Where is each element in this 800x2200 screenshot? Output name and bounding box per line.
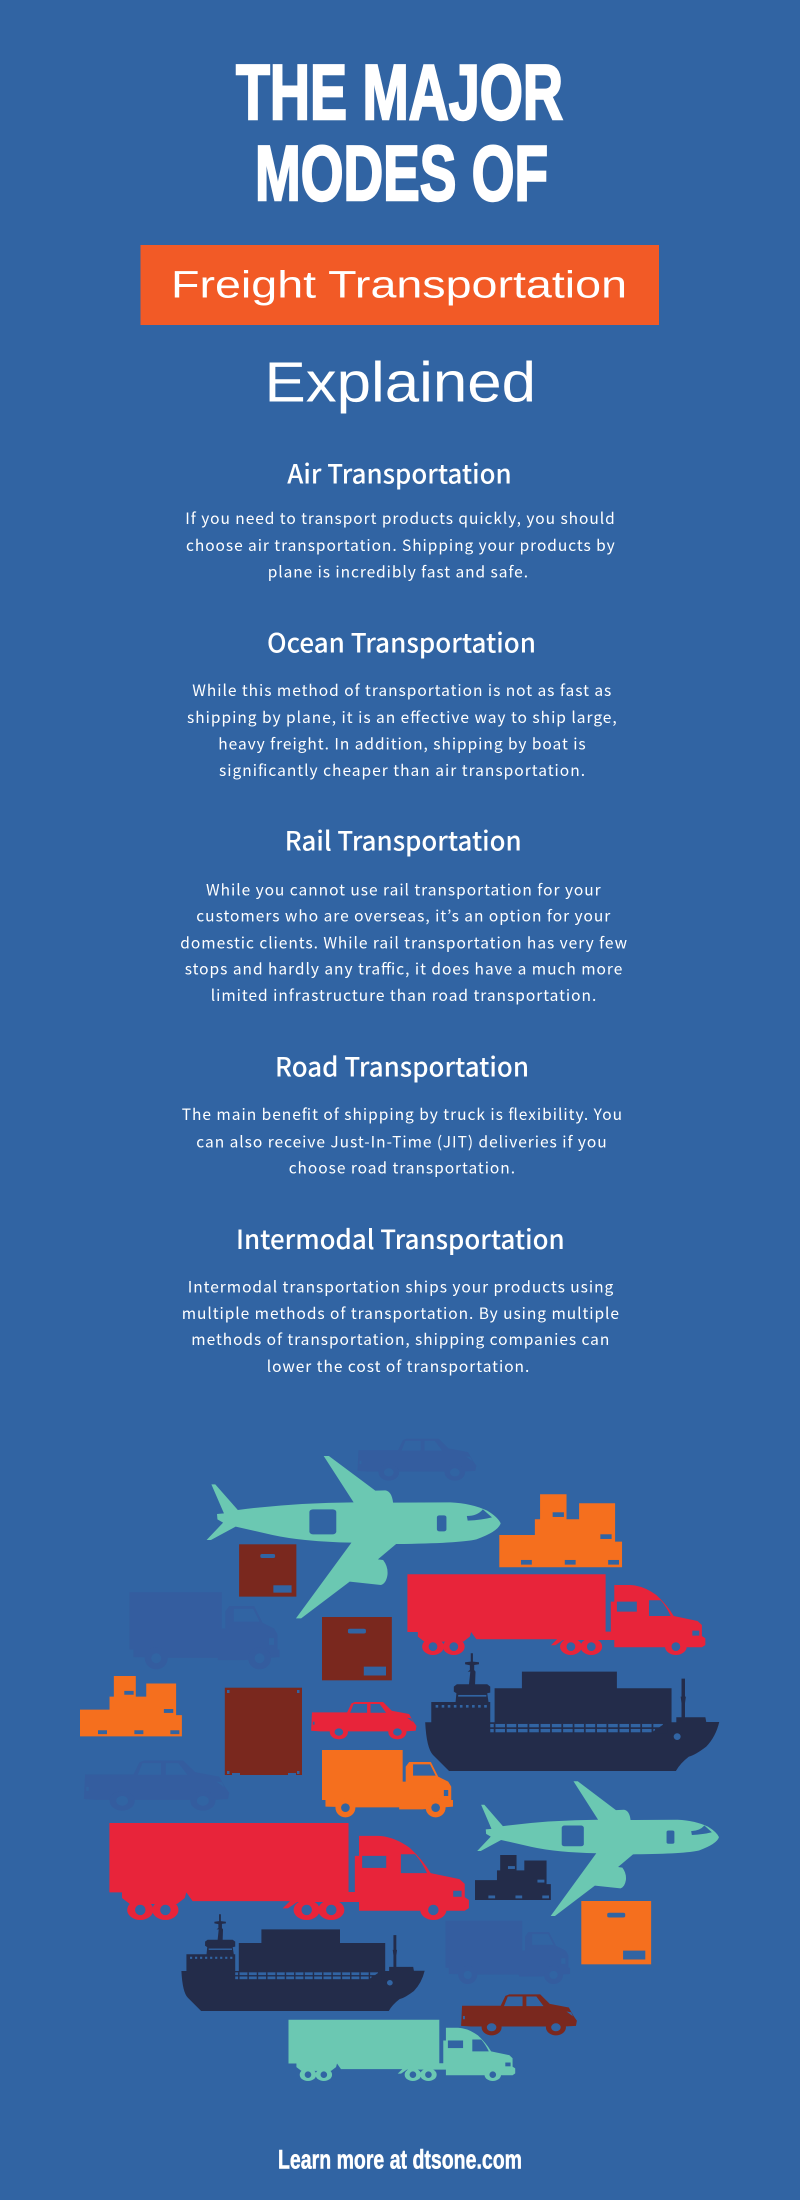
section: air transportation: Air Transportation xyxy=(287,452,512,491)
icon: faded box truck lower xyxy=(446,1921,570,1984)
banner: freight transportation xyxy=(140,245,659,325)
icon: teal plane xyxy=(207,1456,501,1618)
section: ocean transportation xyxy=(187,621,617,781)
section: ocean transportation: shipping by plane, it is an effective way to ship large, xyxy=(187,706,617,728)
section: road transportation xyxy=(182,1046,622,1178)
section: ocean transportation: heavy freight. In addition, shipping by boat is xyxy=(218,732,586,754)
section: ocean transportation: Ocean Transportation xyxy=(267,621,536,660)
section: rail transportation: stops and hardly any traffic, it does have a much more xyxy=(185,957,622,979)
icon: teal semi truck xyxy=(288,2020,515,2081)
section: ocean transportation: While this method of transportation is not as fast as xyxy=(192,679,611,701)
title: THE MAJOR xyxy=(236,48,563,136)
section: air transportation: choose air transportation. Shipping your products by xyxy=(186,534,615,556)
section: intermodal transportation: lower the cost of transportation. xyxy=(267,1355,529,1377)
illustration: vehicles and cargo cluster xyxy=(80,1439,719,2081)
title xyxy=(236,48,563,217)
icon: faded box truck xyxy=(129,1592,279,1669)
section: rail transportation: customers who are overseas, it’s an option for your xyxy=(196,905,611,927)
section: intermodal transportation xyxy=(182,1218,619,1377)
section: air transportation xyxy=(185,452,615,582)
icon: orange pallets xyxy=(499,1494,622,1567)
footer: call to action: Learn more at dtsone.com xyxy=(278,2144,522,2174)
section: road transportation: Road Transportation xyxy=(275,1046,529,1085)
section: road transportation: can also receive Just-In-Time (JIT) deliveries if you xyxy=(196,1130,607,1152)
icon: dark red box large xyxy=(322,1617,392,1680)
icon: faded pickup left xyxy=(84,1760,229,1811)
icon: navy pallets small xyxy=(475,1855,551,1900)
title: MODES OF xyxy=(255,129,548,217)
icon: orange box xyxy=(581,1901,651,1964)
icon: dark red pickup xyxy=(461,1994,577,2035)
section: intermodal transportation: Intermodal Transportation xyxy=(236,1218,565,1257)
section: ocean transportation: significantly cheaper than air transportation. xyxy=(219,759,585,781)
section: rail transportation: limited infrastructure than road transportation. xyxy=(211,984,596,1006)
section: road transportation: The main benefit of shipping by truck is flexibility. You xyxy=(182,1103,622,1125)
icon: dark red container xyxy=(225,1688,302,1775)
icon: red semi truck large xyxy=(109,1823,469,1920)
icon: faded pickup top xyxy=(358,1439,476,1481)
icon: orange pallets left xyxy=(80,1676,182,1736)
subtitle: explained: Explained xyxy=(264,351,536,415)
section: rail transportation xyxy=(180,820,628,1006)
icon: navy cargo ship lower xyxy=(181,1914,425,2011)
section: intermodal transportation: Intermodal transportation ships your products using xyxy=(188,1275,614,1297)
section: air transportation: If you need to transport products quickly, you should xyxy=(185,507,615,529)
icon: orange box truck xyxy=(322,1750,453,1817)
section: rail transportation: While you cannot use rail transportation for your xyxy=(206,879,602,901)
section: road transportation: choose road transportation. xyxy=(289,1156,515,1178)
icon: dark red box small xyxy=(239,1544,296,1597)
icon: navy cargo ship xyxy=(425,1653,719,1771)
section: intermodal transportation: methods of transportation, shipping companies can xyxy=(191,1328,609,1350)
icon: red pickup xyxy=(311,1702,416,1739)
section: intermodal transportation: multiple methods of transportation. By using multiple xyxy=(182,1302,619,1324)
section: air transportation: plane is incredibly fast and safe. xyxy=(268,560,528,582)
section: rail transportation: domestic clients. While rail transportation has very few xyxy=(180,931,628,953)
icon: red semi truck xyxy=(407,1574,705,1655)
icon: teal plane right xyxy=(477,1781,719,1916)
banner: freight transportation: Freight Transportation xyxy=(171,265,627,307)
section: rail transportation: Rail Transportation xyxy=(285,820,522,859)
